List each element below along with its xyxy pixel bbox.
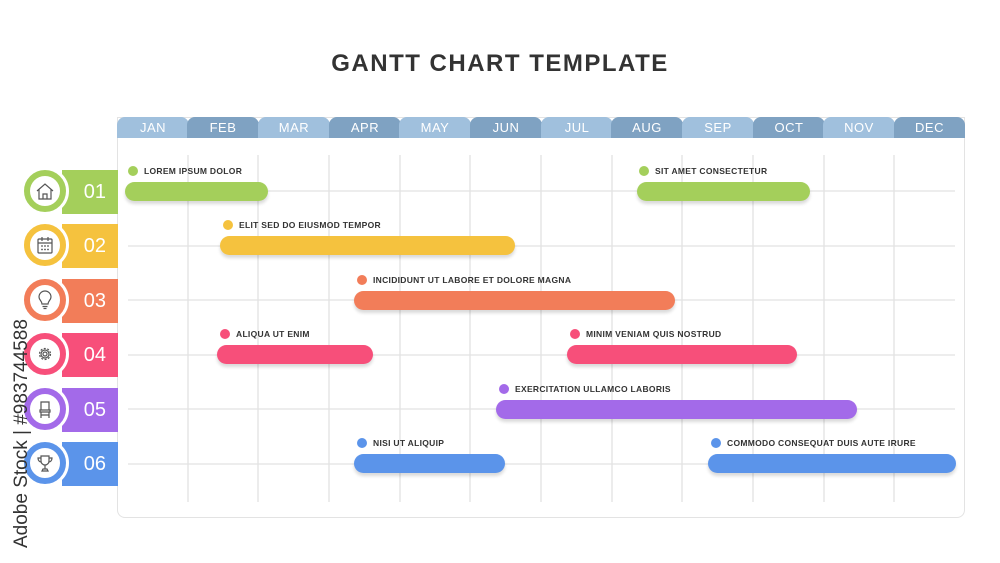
watermark id text: Adobe Stock | #983744588 [11,319,32,548]
month header: JAN [140,120,166,135]
row 5: EXERCITATION ULLAMCO LABORIS [515,384,671,394]
month header [117,117,965,138]
row 2: ELIT SED DO EIUSMOD TEMPOR [239,220,381,230]
icon: gear [21,330,69,378]
row 1: 01 [84,181,106,203]
panel: chart [117,117,965,518]
row 1: SIT AMET CONSECTETUR [655,166,767,176]
icon: house [21,167,69,215]
row 5 [24,384,858,432]
month header: OCT [775,120,803,135]
row 4: ALIQUA UT ENIM [236,329,310,339]
icon: chair [21,385,69,433]
row 3: 03 [84,290,106,312]
grid [128,155,955,502]
row 3: INCIDIDUNT UT LABORE ET DOLORE MAGNA [373,275,571,285]
month header: SEP [704,120,732,135]
row 2 [24,220,516,268]
month header: MAR [279,120,309,135]
row 6 [24,438,957,486]
row 6: COMMODO CONSEQUAT DUIS AUTE IRURE [727,438,916,448]
row 4 [24,329,798,377]
icon: trophy [21,439,69,487]
row 1: LOREM IPSUM DOLOR [144,166,242,176]
month header: JUL [565,120,589,135]
row 3 [24,275,676,323]
row 2: 02 [84,235,106,257]
row 4: MINIM VENIAM QUIS NOSTRUD [586,329,721,339]
row 4: 04 [84,344,106,366]
row 6: NISI UT ALIQUIP [373,438,444,448]
row 5: 05 [84,399,106,421]
month header: APR [351,120,379,135]
title: GANTT CHART TEMPLATE [331,50,669,77]
icon: calendar [21,221,69,269]
month header: MAY [421,120,449,135]
row 1 [24,166,811,214]
month header: AUG [632,120,662,135]
month header: FEB [210,120,236,135]
month header: NOV [844,120,874,135]
month header: DEC [915,120,944,135]
month header: JUN [493,120,519,135]
icon: bulb [21,276,69,324]
row 6: 06 [84,453,106,475]
